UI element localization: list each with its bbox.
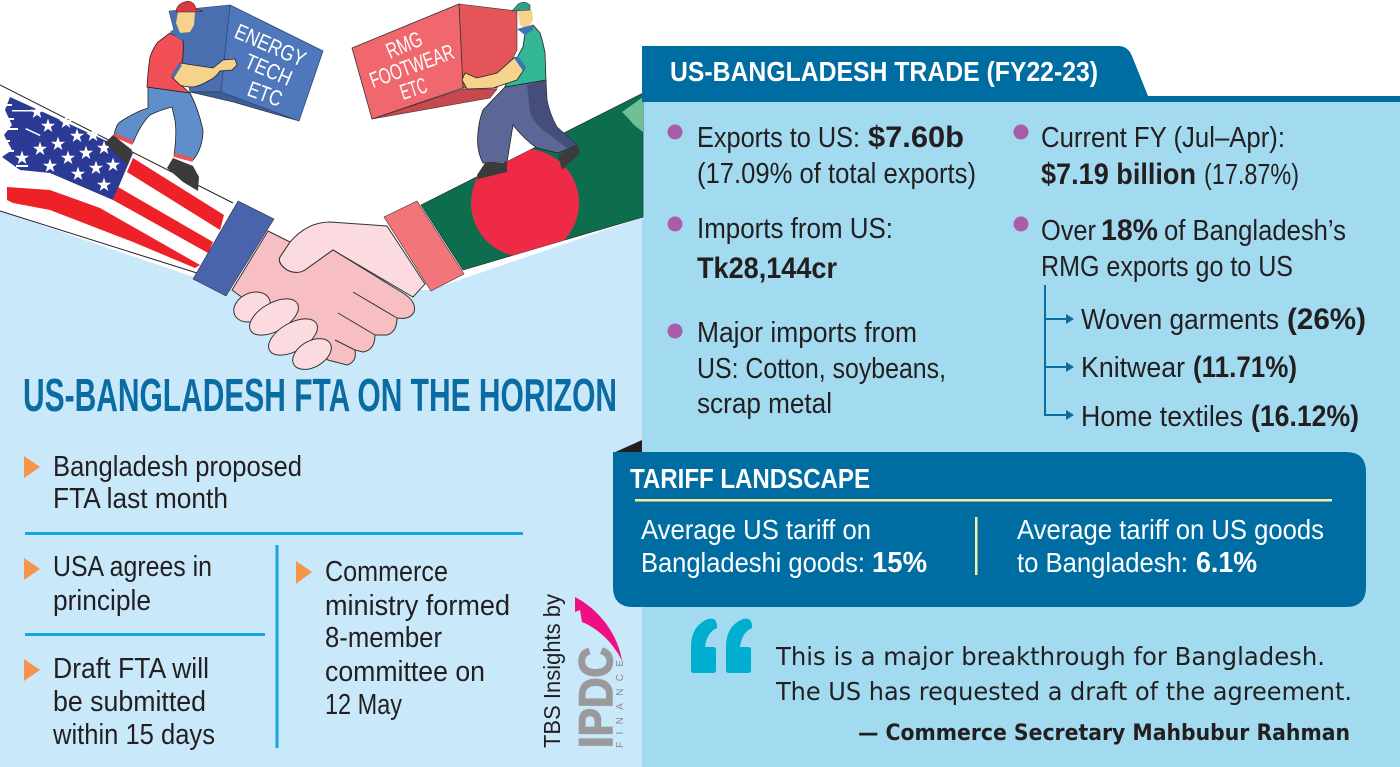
panel: tariff landscape: 6.1%	[1196, 547, 1257, 579]
item: draft FTA: be submitted	[53, 686, 206, 718]
box label: energy tech etc: ENERGY	[231, 19, 310, 72]
logo: TBS Insights by IPDC Finance	[539, 594, 626, 748]
quote: Commerce Secretary: The US has requested a draft of the agreement.	[775, 677, 1352, 706]
right cuff	[384, 201, 464, 291]
logo: TBS Insights by IPDC Finance: TBS Insights by	[539, 594, 565, 748]
tree: RMG breakdown: Home textiles	[1081, 401, 1243, 433]
tree: RMG breakdown	[1045, 285, 1366, 433]
fact: RMG exports: RMG exports go to US	[1041, 251, 1293, 283]
header: trade panel	[642, 46, 1400, 102]
item: USA agrees	[24, 551, 212, 617]
fact: RMG exports: 18%	[1101, 214, 1158, 247]
list: FTA timeline	[24, 451, 523, 751]
fact: current FY: Current FY (Jul–Apr):	[1041, 122, 1285, 154]
US flag arm	[0, 85, 233, 273]
fact: major imports: scrap metal	[697, 388, 832, 420]
box label: energy tech etc: TECH	[241, 49, 296, 91]
tree: RMG breakdown: (16.12%)	[1251, 400, 1359, 433]
tree: RMG breakdown: (11.71%)	[1193, 351, 1297, 384]
item: committee: Commerce	[325, 556, 448, 588]
icon: quotation marks	[691, 619, 752, 673]
item: proposed: Bangladesh proposed	[53, 451, 302, 483]
fact: exports: (17.09% of total exports)	[697, 158, 976, 190]
panel: tariff landscape: TARIFF LANDSCAPE	[630, 463, 870, 494]
item: committee: ministry formed	[325, 590, 510, 622]
fact: current FY	[1014, 122, 1299, 191]
box label: energy tech etc: ETC	[244, 76, 286, 112]
quote: Commerce Secretary: — Commerce Secretary Mahbubur Rahman	[858, 721, 1350, 746]
fact: current FY: (17.87%)	[1204, 159, 1299, 191]
fact: exports: Exports to US:	[697, 122, 860, 154]
fact: RMG exports	[1014, 214, 1346, 283]
box label: rmg footwear etc: FOOTWEAR	[366, 39, 457, 93]
panel: trade facts left column	[668, 121, 976, 420]
panel: tariff landscape: Average US tariff on	[641, 514, 871, 545]
red box	[352, 4, 517, 119]
box label: rmg footwear etc: ETC	[397, 73, 430, 105]
header: trade panel: US-BANGLADESH TRADE (FY22-23)	[670, 56, 1098, 87]
panel: tariff landscape: to Bangladesh:	[1017, 547, 1188, 578]
panel: tariff landscape: Bangladeshi goods:	[641, 547, 865, 578]
left cuff	[193, 201, 274, 296]
blue box	[169, 5, 323, 121]
right worker	[462, 2, 580, 179]
quote: Commerce Secretary	[775, 642, 1352, 746]
item: draft FTA: Draft FTA will	[53, 653, 209, 685]
fact: exports: $7.60b	[868, 121, 964, 154]
item: committee: 12 May	[325, 689, 402, 721]
fact: exports	[668, 121, 976, 190]
panel: tariff landscape: 15%	[872, 547, 927, 579]
item: committee: committee on	[325, 656, 485, 688]
box label: energy tech etc	[231, 19, 310, 112]
fact: imports	[668, 213, 893, 285]
left hand	[232, 231, 415, 365]
panel: tariff landscape	[613, 440, 1366, 607]
panel: trade background	[642, 96, 1400, 767]
quote: Commerce Secretary: This is a major breakthrough for Bangladesh.	[775, 642, 1325, 671]
box label: rmg footwear etc: RMG	[382, 26, 426, 64]
Bangladesh flag arm	[421, 93, 643, 270]
panel: tariff landscape: Average tariff on US goods	[1017, 514, 1324, 545]
tree: RMG breakdown: (26%)	[1287, 303, 1366, 336]
item: proposed	[24, 451, 302, 515]
logo: TBS Insights by IPDC Finance: FINANCE	[615, 660, 626, 748]
fact: current FY: $7.19 billion	[1041, 158, 1196, 191]
item: draft FTA	[24, 653, 215, 751]
left panel background	[0, 211, 643, 767]
left worker	[105, 1, 237, 191]
item: USA agrees: USA agrees in	[53, 551, 212, 583]
panel: trade facts right column	[1014, 122, 1366, 433]
fact: major imports: US: Cotton, soybeans,	[697, 353, 946, 385]
item: draft FTA: within 15 days	[52, 719, 215, 751]
fact: major imports: Major imports from	[697, 317, 917, 349]
right hand	[279, 222, 425, 297]
logo: TBS Insights by IPDC Finance: IPDC	[569, 647, 622, 748]
item: committee	[296, 556, 510, 721]
box label: rmg footwear etc	[366, 26, 457, 105]
illustration: handshake with flags and workers	[0, 1, 643, 376]
fact: imports: Imports from US:	[697, 213, 893, 245]
tree: RMG breakdown: Knitwear	[1081, 352, 1185, 384]
fact: major imports	[668, 317, 946, 420]
tree: RMG breakdown: Woven garments	[1081, 304, 1279, 336]
fact: RMG exports: of Bangladesh’s	[1164, 215, 1346, 247]
item: USA agrees: principle	[53, 585, 151, 617]
item: committee: 8-member	[325, 622, 442, 654]
item: proposed: FTA last month	[53, 483, 228, 515]
fact: RMG exports: Over	[1041, 215, 1096, 247]
fingers	[229, 286, 337, 376]
main title: US-BANGLADESH FTA ON THE HORIZON	[23, 369, 617, 421]
fact: imports: Tk28,144cr	[697, 252, 837, 285]
